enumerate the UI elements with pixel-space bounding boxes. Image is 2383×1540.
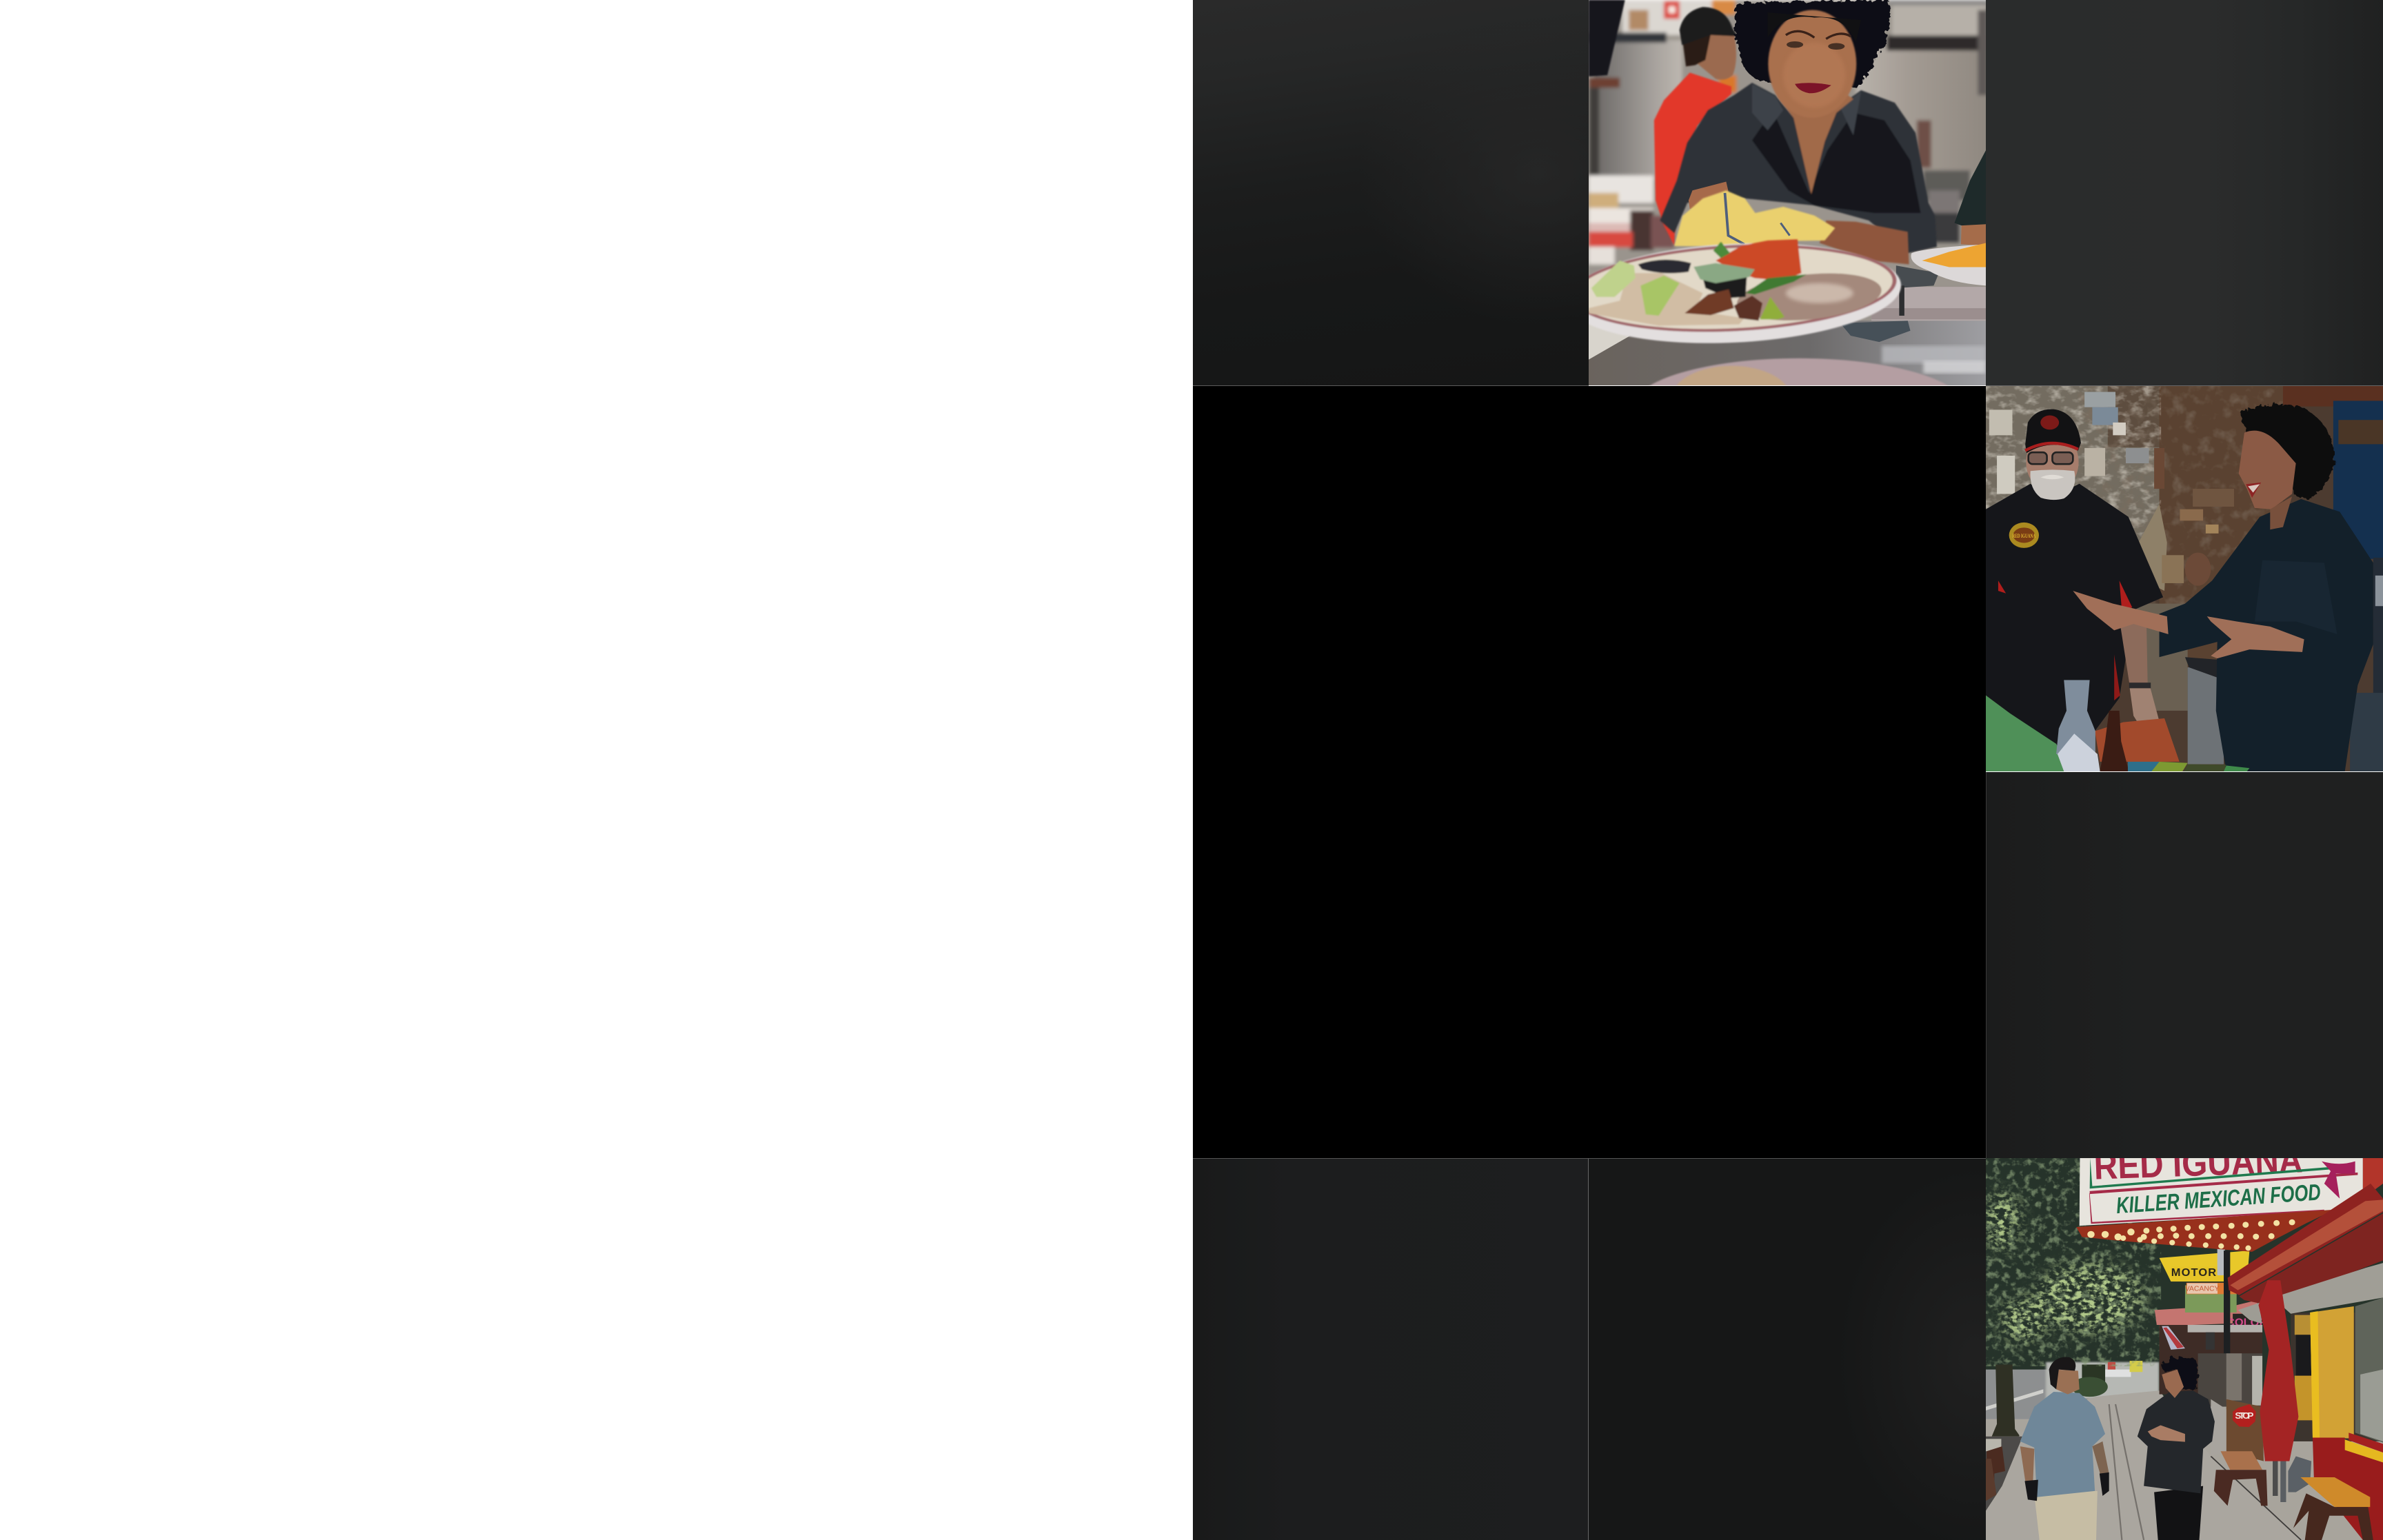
side plate with rice (1911, 243, 1986, 285)
main plate of food (1564, 235, 1904, 351)
red building with yellow bricks (2228, 1184, 2383, 1540)
background motel and roof (2155, 1248, 2268, 1395)
man in black shirt and cap (1986, 409, 2163, 749)
kitchen background (1586, 0, 1993, 386)
photo: couple talking with guests at a stone wall (1986, 386, 2383, 771)
seated guest (1986, 583, 2028, 696)
page: photo grid on white (1193, 0, 2383, 1540)
foreground plate (1633, 358, 1965, 456)
background motel and roof: COLOR (2226, 1317, 2268, 1329)
panel: white left column (0, 0, 1193, 1540)
table surface (1586, 265, 1993, 386)
photo: two people outside the Red Iguana sign (1986, 1158, 2383, 1540)
Red Iguana sign (2080, 1158, 2383, 1226)
photo: chef serving a plate in the kitchen (1589, 0, 1986, 385)
benches (2214, 1451, 2373, 1540)
panel: black centre tile (1193, 386, 1986, 1158)
background motel and roof: VACANCY (2185, 1286, 2220, 1293)
woman in black walking (2138, 1357, 2215, 1540)
fence and wood screen (2198, 1353, 2264, 1461)
metal bin (2185, 657, 2224, 764)
wall background (1979, 379, 2383, 772)
panel: dark tile bottom centre (1589, 1158, 1986, 1540)
chef in blue-grey coat (2020, 1357, 2109, 1540)
red umbrella (2258, 1280, 2298, 1461)
cook in red shirt (1654, 7, 1738, 245)
background motel and roof: MOTOR (2171, 1266, 2217, 1279)
table items (1986, 680, 2249, 771)
chef woman (1660, 0, 1937, 264)
sidewalk (1986, 1390, 2304, 1540)
black monitor top left (1589, 0, 1625, 77)
panel: dark tile bottom left (1193, 1158, 1589, 1540)
marquee lights (2076, 1210, 2335, 1252)
person at right edge (1954, 150, 1986, 245)
man in black shirt and cap: RED IGUANA (2012, 532, 2035, 539)
fence and wood screen: STOP (2235, 1410, 2254, 1421)
woman in black shirt gesturing (2073, 405, 2373, 771)
panel: dark tile top left (1193, 0, 1589, 386)
panel: dark tile middle right (1986, 772, 2383, 1158)
trees and street (1979, 1151, 2383, 1540)
panel: dark tile top right (1986, 0, 2383, 386)
